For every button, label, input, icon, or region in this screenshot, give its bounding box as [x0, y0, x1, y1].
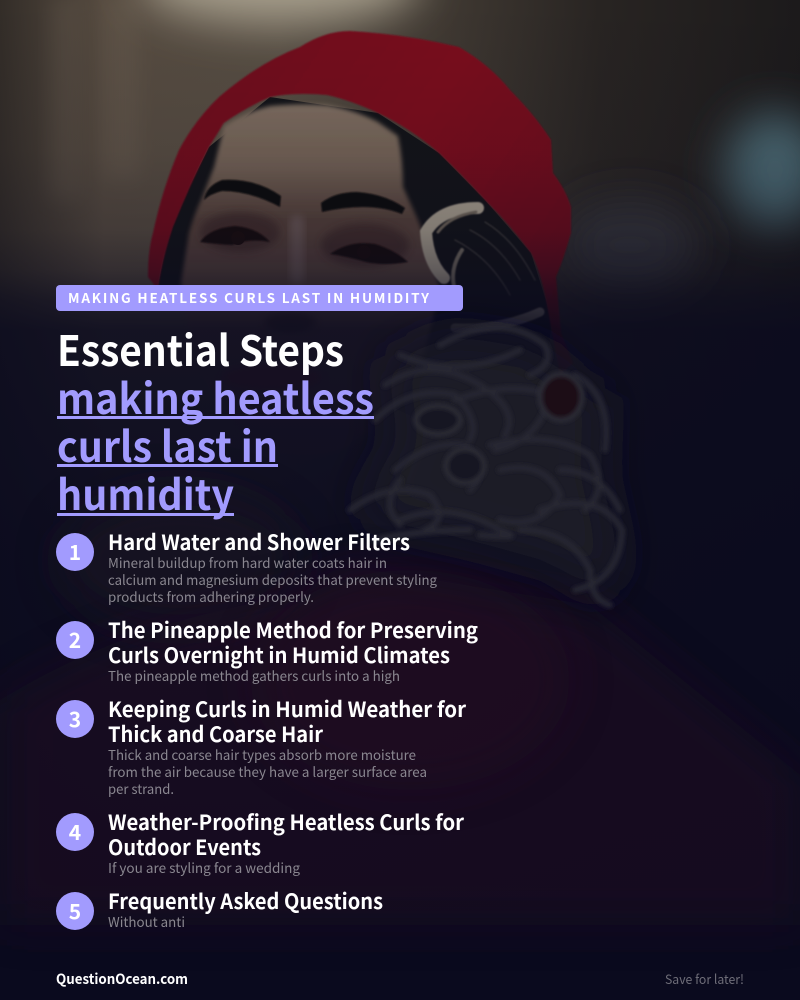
- step 4 heading: [108, 807, 465, 862]
- step 1 heading: Hard Water and Shower Filters: [108, 527, 410, 557]
- title: curls last in: [57, 414, 278, 475]
- step 4: [56, 807, 465, 877]
- step 3 heading: [108, 694, 467, 749]
- step 1 description: [108, 552, 437, 606]
- faint neck and jaw: [60, 490, 300, 630]
- category tag: MAKING HEATLESS CURLS LAST IN HUMIDITY: [68, 287, 429, 307]
- category tag: [56, 285, 463, 311]
- step 3 description: from the air because they have a larger surface area: [108, 761, 427, 781]
- step 4 heading: Weather-Proofing Heatless Curls for: [108, 807, 465, 837]
- step 3 heading: Keeping Curls in Humid Weather for: [108, 694, 467, 724]
- step 1 description: Mineral buildup from hard water coats hair in: [108, 552, 387, 572]
- title: humidity: [57, 462, 234, 523]
- step 2: [56, 615, 478, 685]
- footer brand: QuestionOcean.com: [56, 969, 188, 989]
- step 5: [56, 886, 383, 931]
- step 3 description: Thick and coarse hair types absorb more moisture: [108, 744, 416, 764]
- maroon coat: [0, 565, 800, 925]
- number badge 3: [56, 700, 94, 738]
- step 4 description: If you are styling for a wedding: [108, 857, 300, 877]
- step 1: [56, 527, 437, 606]
- top curl highlights and strands: [426, 208, 540, 328]
- nose shadow: [264, 312, 316, 332]
- bokeh glow: [140, 0, 420, 25]
- lips: [222, 365, 322, 391]
- step 4 heading: Outdoor Events: [108, 832, 261, 862]
- number badge 5: 5: [69, 896, 81, 926]
- step 3 description: per strand.: [108, 778, 174, 798]
- step 2 description: The pineapple method gathers curls into a high: [108, 665, 400, 685]
- title: Essential Steps: [57, 318, 344, 379]
- step 2 heading: [108, 615, 478, 670]
- step 2 heading: The Pineapple Method for Preserving: [108, 615, 478, 645]
- title: making heatless: [57, 366, 374, 427]
- number badge 4: 4: [69, 817, 81, 847]
- step 2 heading: Curls Overnight in Humid Climates: [108, 640, 450, 670]
- curls mass: [360, 335, 620, 600]
- step 5 description: Without anti: [108, 911, 185, 931]
- number badge 1: 1: [69, 537, 81, 567]
- step 5 heading: Frequently Asked Questions: [108, 886, 383, 916]
- footer call to action: Save for later!: [665, 969, 744, 988]
- dark hair behind the hat: [158, 97, 552, 420]
- beret: [148, 31, 573, 375]
- eye shadow, brows and eyes: [200, 180, 409, 285]
- step 3 heading: Thick and Coarse Hair: [108, 719, 324, 749]
- number badge 2: [56, 621, 94, 659]
- number badge 5: [56, 892, 94, 930]
- step 3: [56, 694, 467, 798]
- number badge 2: 2: [69, 625, 81, 655]
- curl rings: [416, 374, 582, 483]
- face: [181, 104, 440, 456]
- step 1 description: products from adhering properly.: [108, 586, 314, 606]
- title: [57, 318, 374, 523]
- number badge 4: [56, 813, 94, 851]
- step 3 description: [108, 744, 427, 798]
- number badge 1: [56, 533, 94, 571]
- number badge 3: 3: [69, 704, 81, 734]
- step 1 description: calcium and magnesium deposits that prevent styling: [108, 569, 437, 589]
